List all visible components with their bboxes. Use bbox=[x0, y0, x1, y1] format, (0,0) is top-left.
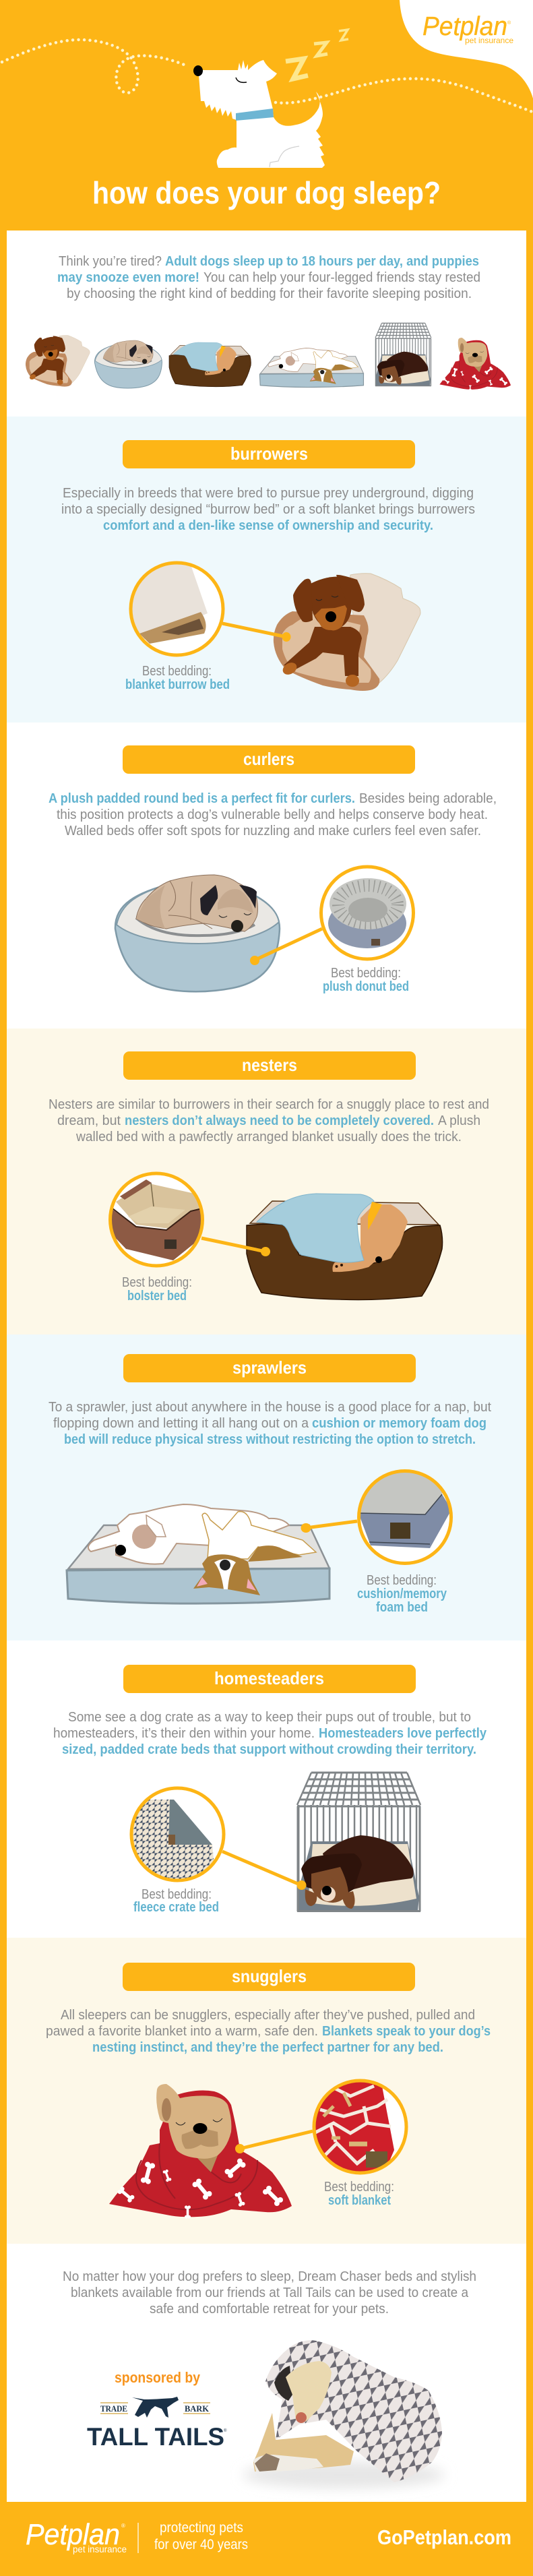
caption: burrowers: blanket burrow bed bbox=[125, 677, 230, 692]
text: nesters: dream, but bbox=[57, 1113, 121, 1128]
caption: snugglers: Best bedding: bbox=[324, 2180, 394, 2195]
closing text bbox=[63, 2269, 476, 2317]
text: nesters: nesters don’t always need to be completely covered. bbox=[125, 1113, 434, 1128]
photo: dog in houndstooth blanket bbox=[243, 2340, 445, 2488]
text: snugglers bbox=[46, 2008, 491, 2055]
leader line: homesteaders bbox=[222, 1851, 306, 1890]
logo: Petplan white: pet insurance bbox=[73, 2544, 127, 2554]
illustration: dog in wire crate bbox=[297, 1773, 420, 1912]
heading: burrowers bbox=[123, 440, 415, 468]
caption: homesteaders: Best bedding: bbox=[142, 1887, 212, 1902]
intro text: Think you’re tired? bbox=[59, 254, 162, 269]
lens: plush donut bed bbox=[321, 867, 414, 959]
text: sprawlers: flopping down and letting it all hang out on a bbox=[53, 1416, 309, 1431]
text: homesteaders bbox=[53, 1710, 487, 1757]
icon row: six sleepers bbox=[26, 323, 511, 390]
caption: nesters: Best bedding: bbox=[122, 1275, 192, 1290]
heading: burrowers: burrowers bbox=[230, 443, 308, 464]
caption: homesteaders bbox=[133, 1887, 219, 1915]
text: curlers: Besides being adorable, bbox=[359, 791, 497, 806]
tagline: for over 40 years bbox=[154, 2537, 248, 2552]
caption: homesteaders: fleece crate bed bbox=[133, 1900, 219, 1915]
caption: sprawlers: Best bedding: bbox=[367, 1573, 437, 1588]
text: snugglers: nesting instinct, and they’re the perfect partner for any bed. bbox=[92, 2040, 443, 2055]
text: sprawlers: cushion or memory foam dog bbox=[312, 1416, 487, 1431]
closing text: No matter how your dog prefers to sleep, Dream Chaser beds and stylish bbox=[63, 2269, 476, 2284]
tagline bbox=[154, 2520, 248, 2552]
logo: Petplan: ® bbox=[507, 20, 511, 26]
text: sprawlers bbox=[49, 1400, 491, 1447]
logo: Tall Tails: BARK bbox=[185, 2403, 210, 2414]
heading: nesters bbox=[123, 1051, 416, 1080]
heading: sprawlers: sprawlers bbox=[232, 1357, 307, 1378]
logo: Petplan white: ® bbox=[121, 2523, 125, 2529]
text: burrowers: Especially in breeds that were bred to pursue prey underground, digging bbox=[63, 486, 474, 501]
text: homesteaders: homesteaders, it’s their den within your home. bbox=[53, 1726, 315, 1741]
illustration: pug in donut bed bbox=[115, 875, 280, 991]
logo: Petplan white: Petplan bbox=[26, 2518, 120, 2551]
text: sprawlers: bed will reduce physical stress without restricting the option to stretch. bbox=[64, 1432, 476, 1447]
panel: burrowers bbox=[7, 417, 526, 723]
intro text: by choosing the right kind of bedding for their favorite sleeping position. bbox=[67, 286, 472, 301]
heading: nesters: nesters bbox=[242, 1055, 297, 1075]
caption: burrowers: Best bedding: bbox=[142, 664, 212, 679]
text: burrowers: comfort and a den-like sense of ownership and security. bbox=[103, 518, 433, 533]
logo: Tall Tails: TALL TAILS bbox=[87, 2423, 224, 2451]
text: nesters: Nesters are similar to burrowers in their search for a snuggly place to rest and bbox=[49, 1097, 489, 1112]
leader line: nesters bbox=[201, 1238, 270, 1256]
closing text: safe and comfortable retreat for your pets. bbox=[150, 2302, 389, 2317]
heading: snugglers bbox=[123, 1963, 415, 1991]
heading: homesteaders bbox=[123, 1665, 416, 1693]
heading: homesteaders: homesteaders bbox=[214, 1668, 324, 1688]
caption: sprawlers: cushion/memory bbox=[357, 1587, 447, 1601]
lens: cushion bed bbox=[358, 1469, 451, 1564]
illustration: dachshund in burrow bed bbox=[274, 574, 420, 691]
tagline: protecting pets bbox=[160, 2520, 243, 2536]
text: nesters: A plush bbox=[438, 1113, 480, 1128]
text: burrowers: into a specially designed “burrow bed” or a soft blanket brings burrowers bbox=[61, 502, 475, 517]
leader line: sprawlers bbox=[301, 1521, 357, 1533]
caption: snugglers: soft blanket bbox=[328, 2193, 391, 2208]
caption: curlers: plush donut bed bbox=[323, 979, 409, 994]
panel: sprawlers bbox=[7, 1335, 526, 1640]
panel: intro bbox=[7, 231, 526, 417]
lens: bolster bed bbox=[111, 1173, 203, 1266]
text: homesteaders: sized, padded crate beds that support without crowding their territory. bbox=[62, 1742, 476, 1757]
logo: Tall Tails: TRADE bbox=[100, 2403, 127, 2414]
caption: curlers bbox=[323, 966, 409, 994]
heading: curlers bbox=[123, 745, 415, 774]
logo corner shape bbox=[400, 0, 533, 98]
dotted trail bbox=[2, 40, 532, 112]
text: nesters: walled bed with a pawfectly arranged blanket usually does the trick. bbox=[75, 1130, 462, 1144]
text: curlers: Walled beds offer soft spots for nuzzling and make curlers feel even safer. bbox=[65, 824, 481, 838]
heading: curlers: curlers bbox=[243, 749, 294, 769]
icon: zzz bbox=[286, 30, 348, 79]
text: snugglers: All sleepers can be snugglers, especially after they’ve pushed, pulled and bbox=[61, 2008, 475, 2023]
heading: sprawlers bbox=[123, 1354, 416, 1382]
text: burrowers bbox=[61, 486, 475, 533]
caption: curlers: Best bedding: bbox=[331, 966, 401, 981]
logo: Petplan: pet insurance bbox=[465, 36, 513, 45]
text: nesters bbox=[49, 1097, 489, 1144]
title: how does your dog sleep? bbox=[92, 175, 441, 210]
text: homesteaders: Homesteaders love perfectly bbox=[319, 1726, 487, 1741]
footer bbox=[26, 2518, 511, 2554]
logo: Tall Tails bbox=[87, 2397, 227, 2451]
intro text: may snooze even more! bbox=[57, 270, 199, 285]
illustration: dog under blanket in bolster bed bbox=[247, 1194, 443, 1299]
caption: nesters bbox=[122, 1275, 192, 1304]
sponsored by label: sponsored by bbox=[115, 2369, 201, 2386]
panel: nesters bbox=[7, 1029, 526, 1335]
website: GoPetplan.com bbox=[377, 2525, 511, 2549]
leader line: snugglers bbox=[235, 2131, 313, 2153]
text: curlers: this position protects a dog’s vulnerable belly and helps conserve body heat. bbox=[57, 807, 488, 822]
icon: sleeping terrier bbox=[193, 60, 325, 168]
lens: fleece crate bed bbox=[128, 1788, 224, 1880]
text: homesteaders: Some see a dog crate as a way to keep their pups out of trouble, but to bbox=[68, 1710, 471, 1725]
leader line: burrowers bbox=[222, 623, 291, 642]
closing text: blankets available from our friends at Tall Tails can be used to create a bbox=[71, 2286, 469, 2300]
text: curlers bbox=[49, 791, 497, 838]
intro text: You can help your four-legged friends stay rested bbox=[203, 270, 480, 285]
caption: nesters: bolster bed bbox=[127, 1289, 187, 1304]
illustration: dog wrapped in red blanket bbox=[109, 2084, 292, 2219]
text: snugglers: Blankets speak to your dog’s bbox=[322, 2024, 491, 2039]
panel: homesteaders bbox=[7, 1640, 526, 1938]
caption: burrowers bbox=[125, 664, 230, 692]
logo: Tall Tails: ® bbox=[224, 2428, 227, 2433]
caption: snugglers bbox=[324, 2180, 394, 2208]
text: curlers: A plush padded round bed is a perfect fit for curlers. bbox=[49, 791, 355, 806]
lens: blanket burrow bed bbox=[125, 563, 223, 655]
text: snugglers: pawed a favorite blanket into a warm, safe den. bbox=[46, 2024, 318, 2039]
panel: curlers bbox=[7, 723, 526, 1029]
caption: sprawlers bbox=[357, 1573, 447, 1615]
panel: closing bbox=[7, 2244, 526, 2502]
heading: snugglers: snugglers bbox=[232, 1966, 307, 1986]
illustration: two dogs on cushion bed bbox=[67, 1504, 330, 1603]
logo: Petplan: Petplan bbox=[422, 12, 507, 41]
intro text: Adult dogs sleep up to 18 hours per day, and puppies bbox=[165, 254, 479, 269]
text: sprawlers: To a sprawler, just about anywhere in the house is a good place for a nap, but bbox=[49, 1400, 491, 1415]
intro text bbox=[57, 254, 480, 301]
header bbox=[2, 0, 533, 210]
leader line: curlers bbox=[250, 929, 322, 965]
caption: sprawlers: foam bed bbox=[376, 1600, 428, 1615]
panel: snugglers bbox=[7, 1938, 526, 2244]
lens: soft blanket bbox=[314, 2079, 406, 2174]
